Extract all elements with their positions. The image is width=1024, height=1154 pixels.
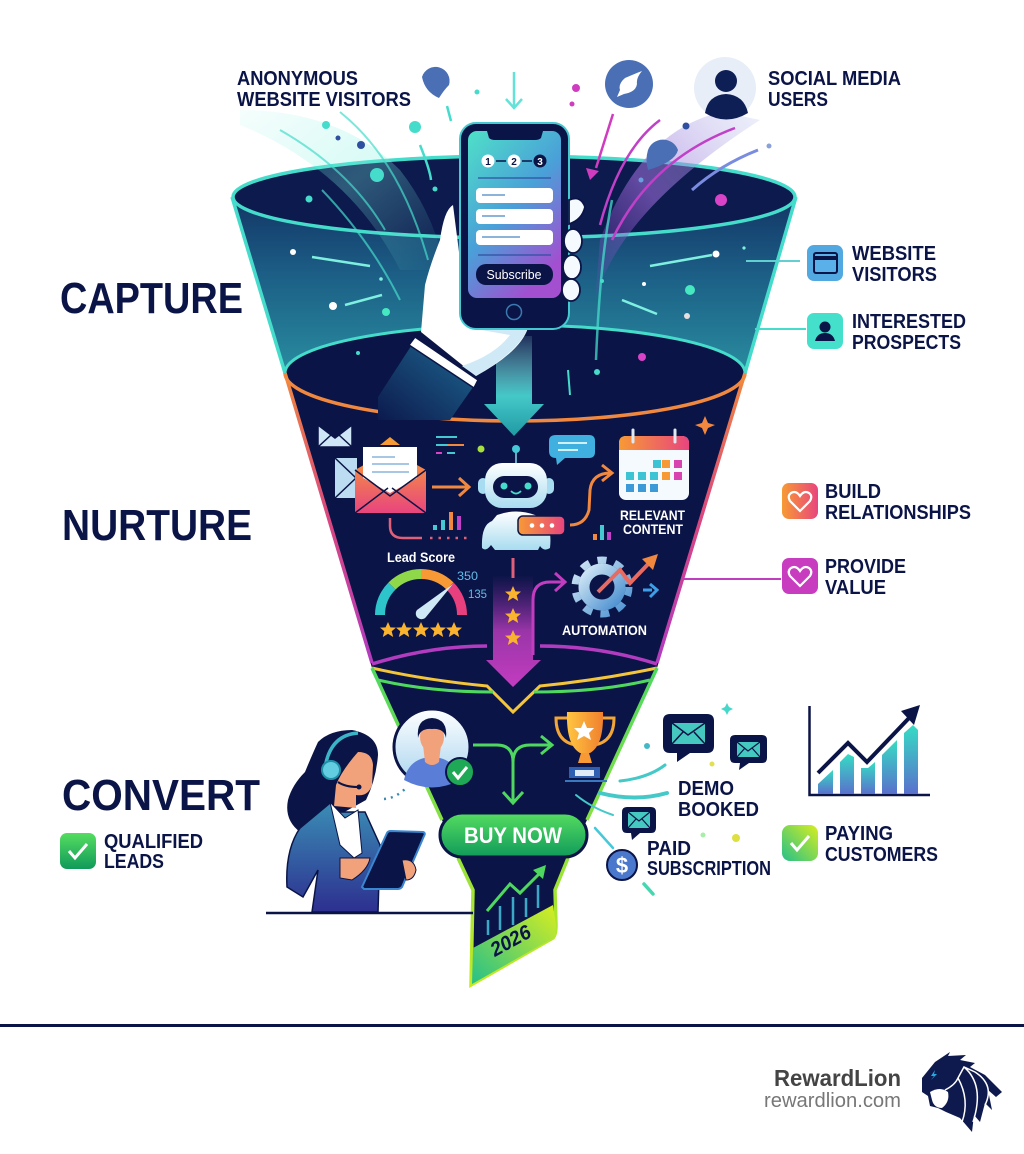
nurture funnel section (285, 325, 745, 668)
particles in capture funnel (290, 121, 772, 395)
icon: location pin right (646, 140, 678, 170)
label: provide value (825, 556, 906, 599)
footer brand text (764, 1065, 901, 1112)
phone: 2 (511, 157, 517, 168)
badge: qualified leads (60, 833, 96, 869)
buy now button: BUY NOW (464, 823, 562, 848)
arrow: magenta to automation (533, 573, 565, 655)
label: qualified leads (104, 831, 203, 873)
convert funnel section (372, 646, 657, 985)
relevant content label (620, 507, 685, 537)
arrow: robot to calendar (570, 465, 612, 525)
label: build relationships: BUILD (825, 481, 881, 503)
icon: automation gear (575, 554, 658, 614)
arrow: purple down with stars (486, 558, 541, 687)
base line (266, 912, 473, 914)
arrow: teal incoming (506, 72, 522, 108)
label: demo booked (678, 778, 759, 821)
lead score gauge (380, 549, 487, 637)
dots top (447, 84, 580, 121)
sparkle (695, 416, 715, 435)
label: social media users: SOCIAL MEDIA (768, 68, 901, 90)
label: provide value: VALUE (825, 577, 886, 599)
lead score gauge: 135 (468, 587, 487, 601)
heading: nurture: NURTURE (62, 501, 252, 550)
mail bubble large (663, 714, 714, 762)
2026 band: 2026 (486, 921, 536, 962)
label: demo booked: DEMO (678, 778, 734, 800)
relevant content label: RELEVANT (620, 507, 685, 523)
capture funnel section (232, 155, 796, 423)
label: anonymous website visitors (237, 68, 411, 111)
label: build relationships (825, 481, 971, 524)
badge: paying customers (782, 825, 818, 861)
icon: lion logo (922, 1052, 1002, 1132)
mail bubble medium (730, 735, 767, 770)
badge: interested prospects (807, 313, 843, 349)
swoosh: social media stream (595, 112, 760, 360)
label: paid subscription: PAID (647, 838, 691, 860)
badge: website visitors (807, 245, 843, 281)
label: paying customers (825, 823, 938, 866)
label: demo booked: BOOKED (678, 799, 759, 821)
lead score gauge: 350 (457, 569, 478, 583)
icon: dollar coin: $ (616, 853, 628, 878)
connector lines (683, 261, 806, 579)
label: anonymous website visitors: WEBSITE VISITORS (237, 89, 411, 111)
icon: fingers (562, 199, 585, 301)
label: provide value: PROVIDE (825, 556, 906, 578)
phone (460, 123, 569, 329)
badge: build relationships (782, 483, 818, 519)
icon: social user (694, 57, 756, 120)
lead score gauge: Lead Score (387, 549, 455, 565)
label: paying customers: CUSTOMERS (825, 844, 938, 866)
buy now button (440, 813, 587, 857)
label: website visitors: WEBSITE (852, 243, 936, 265)
footer brand text: rewardlion.com (764, 1090, 901, 1112)
dotted signal (384, 788, 406, 799)
label: website visitors (852, 243, 937, 286)
chat bubble blue (549, 435, 595, 465)
label: anonymous website visitors: ANONYMOUS (237, 68, 358, 90)
robot (478, 445, 554, 550)
mail bubble small (622, 807, 656, 840)
icon: compass circle (605, 60, 653, 108)
badge: provide value (782, 558, 818, 594)
icon: trophy (556, 712, 614, 781)
phone: 1 (485, 157, 491, 168)
swoosh: anonymous visitors stream (240, 110, 445, 300)
automation label: AUTOMATION (562, 622, 647, 638)
label: qualified leads: QUALIFIED (104, 831, 203, 853)
footer brand text: RewardLion (774, 1065, 901, 1091)
label: paid subscription: SUBSCRIPTION (647, 858, 771, 880)
qualified person avatar (394, 709, 474, 788)
label: paying customers: PAYING (825, 823, 893, 845)
arrow: teal down (484, 336, 544, 436)
icon: email envelope group (318, 425, 426, 513)
heading: convert: CONVERT (62, 771, 260, 820)
mini text lines and dot (436, 437, 484, 453)
label: interested prospects: PROSPECTS (852, 332, 961, 354)
icon: calendar (619, 430, 689, 500)
arrow: green split (473, 736, 552, 803)
chat bubble orange (518, 516, 565, 535)
mini bars and dotted line (390, 512, 611, 540)
footer rule (0, 1024, 1024, 1027)
growth bar chart (810, 705, 930, 795)
2026 band (472, 905, 556, 984)
arrow: envelope to robot (432, 478, 469, 496)
label: interested prospects (852, 311, 966, 354)
label: social media users: USERS (768, 89, 828, 111)
heading: capture: CAPTURE (60, 274, 243, 323)
phone: 3 (537, 157, 543, 168)
woman with headset and tablet (287, 730, 425, 912)
icon: location pin left (422, 67, 450, 98)
label: social media users (768, 68, 901, 111)
icon: dollar coin (607, 850, 637, 880)
relevant content label: CONTENT (623, 521, 683, 537)
label: paid subscription (647, 838, 771, 880)
label: interested prospects: INTERESTED (852, 311, 966, 333)
growth chart in funnel (487, 865, 546, 935)
conversion streaks and dots (576, 703, 740, 894)
label: build relationships: RELATIONSHIPS (825, 502, 971, 524)
label: qualified leads: LEADS (104, 851, 164, 873)
label: website visitors: VISITORS (852, 264, 937, 286)
arrow: magenta incoming (586, 114, 613, 180)
icon: hand holding phone back (378, 205, 528, 420)
phone: Subscribe (486, 267, 542, 282)
